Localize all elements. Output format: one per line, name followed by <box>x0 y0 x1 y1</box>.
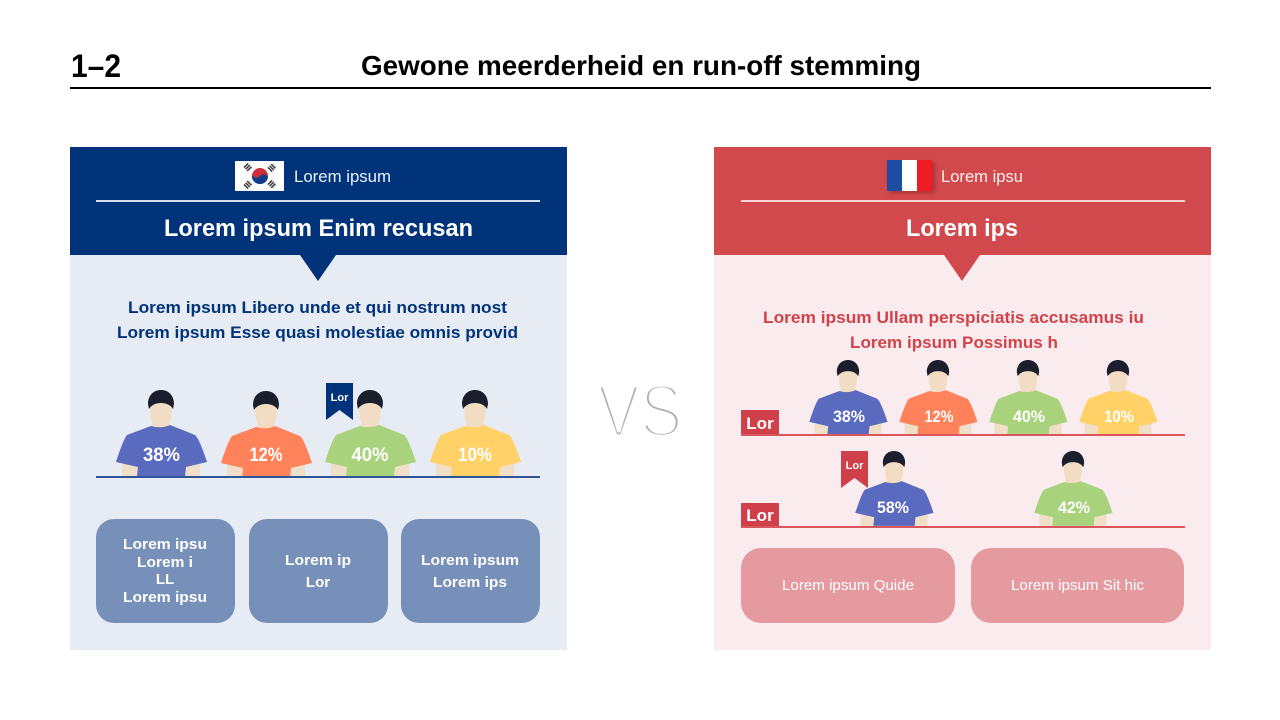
percentages round 1: 40% <box>1013 408 1045 426</box>
winner bookmark: Lor <box>846 460 864 472</box>
panel heading: Lorem ipsum Enim recusan <box>164 215 473 242</box>
round 1 chart <box>741 360 1185 436</box>
person 38% <box>116 390 207 477</box>
panel: Korea <box>70 147 567 650</box>
percentages round 1 <box>833 408 1134 426</box>
box 1: Lorem ipsu <box>123 589 207 606</box>
winner bookmark <box>841 451 868 488</box>
description text <box>763 308 1144 352</box>
description text: Lorem ipsum Ullam perspiciatis accusamus iu <box>763 308 1144 327</box>
percentages round 1: 12% <box>924 408 954 426</box>
person 40%: 40% <box>352 445 389 466</box>
description text: Lorem ipsum Libero unde et qui nostrum nost <box>128 298 507 317</box>
round tag: Lor <box>746 506 774 525</box>
percentages round 1: 38% <box>833 408 865 426</box>
icon: South Korea flag <box>235 161 284 191</box>
box 1 <box>96 519 235 623</box>
percentages round 2: 58% <box>877 499 909 517</box>
box 2 <box>249 519 388 623</box>
description text: Lorem ipsum Esse quasi molestiae omnis provid <box>117 323 518 342</box>
person 10% <box>430 390 521 477</box>
box 1 <box>741 548 955 623</box>
winner bookmark: Lor <box>331 392 349 404</box>
round tag <box>741 503 779 527</box>
description text <box>117 298 518 342</box>
header: France <box>714 147 1211 281</box>
person 40% <box>325 390 416 477</box>
person 12% <box>899 360 978 435</box>
box 2 <box>971 548 1184 623</box>
header: Korea <box>70 147 567 281</box>
person 40% <box>989 360 1068 435</box>
winner bookmark <box>326 383 353 420</box>
icon: France flag <box>887 160 935 193</box>
person 12%: 12% <box>250 445 283 466</box>
person 10% <box>1079 360 1158 435</box>
box 2: Lorem ipsum Sit hic <box>1011 577 1144 594</box>
box 3 <box>401 519 540 623</box>
box 2: Lor <box>306 574 330 591</box>
box 1: Lorem i <box>137 554 193 571</box>
person 58% <box>855 451 934 526</box>
title: Gewone meerderheid en run-off stemming <box>361 50 921 81</box>
box 3: Lorem ips <box>433 574 507 591</box>
box 3: Lorem ipsum <box>421 552 519 569</box>
header label: Lorem ipsum <box>294 167 391 186</box>
section number: 1–2 <box>71 48 121 84</box>
panel: France <box>714 147 1211 650</box>
percentages round 1: 10% <box>1104 408 1134 426</box>
header label: Lorem ipsu <box>941 167 1023 186</box>
person 42% <box>1034 451 1113 526</box>
box 1: Lorem ipsu <box>123 536 207 553</box>
person 38%: 38% <box>143 445 180 466</box>
panel heading: Lorem ips <box>906 215 1018 242</box>
box 1: LL <box>156 571 174 588</box>
person 12% <box>221 391 312 478</box>
round tag <box>741 410 779 435</box>
round tag: Lor <box>746 414 774 433</box>
people chart: Korea <box>96 383 540 478</box>
person 38% <box>809 360 888 435</box>
description text: Lorem ipsum Possimus h <box>850 333 1058 352</box>
person 10%: 10% <box>458 445 492 466</box>
round 2 chart <box>741 451 1185 528</box>
box 1: Lorem ipsum Quide <box>782 577 914 594</box>
box 2: Lorem ip <box>285 552 351 569</box>
percentages round 2 <box>877 499 1090 517</box>
VS label: VS <box>598 369 682 452</box>
percentages round 2: 42% <box>1058 499 1090 517</box>
